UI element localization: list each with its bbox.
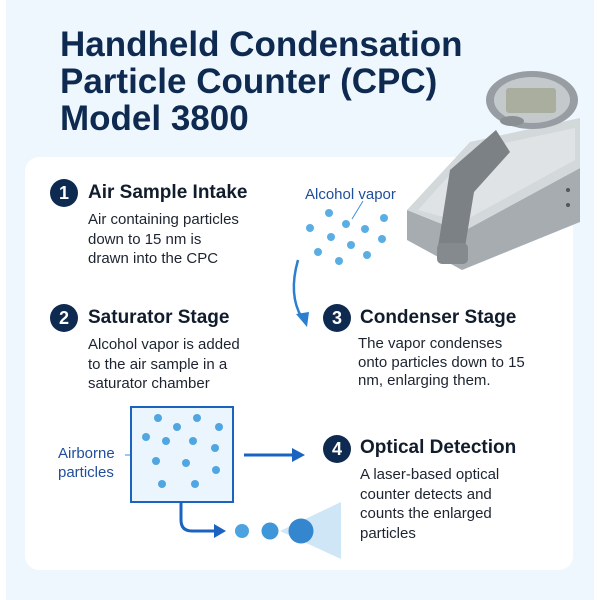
step 3: condenser stage [323,304,525,389]
text: counter detects and [360,486,492,502]
title [60,25,462,138]
text: Air containing particles [88,211,239,228]
text: 2 [59,308,69,328]
label: airborne particles: Airborne [58,445,115,462]
text: The vapor condenses [358,335,502,352]
label: airborne particles [58,445,115,481]
text: drawn into the CPC [88,250,218,267]
text: nm, enlarging them. [358,372,491,389]
title: Handheld Condensation [60,25,462,64]
text: 3 [332,308,342,328]
text: Condenser Stage [360,307,516,328]
text: particles [360,524,416,542]
title: Model 3800 [60,99,249,138]
text: onto particles down to 15 [358,354,525,370]
label: alcohol vapor: Alcohol vapor [305,186,396,203]
step 4: optical detection [323,435,516,542]
text: A laser-based optical [360,466,499,483]
text: 4 [332,439,342,459]
title: Particle Counter (CPC) [60,62,437,101]
label: airborne particles: particles [58,464,114,481]
step 1: air sample intake [50,179,247,267]
text: Saturator Stage [88,307,229,328]
text: counts the enlarged [360,505,492,522]
text: 1 [59,183,69,203]
text: to the air sample in a [88,356,227,372]
text: Air Sample Intake [88,182,247,203]
text: saturator chamber [88,375,210,392]
step 2: saturator stage [50,304,240,392]
text: Optical Detection [360,437,516,458]
text: down to 15 nm is [88,230,201,248]
panel: main card [25,157,573,570]
text: Alcohol vapor is added [88,336,240,353]
